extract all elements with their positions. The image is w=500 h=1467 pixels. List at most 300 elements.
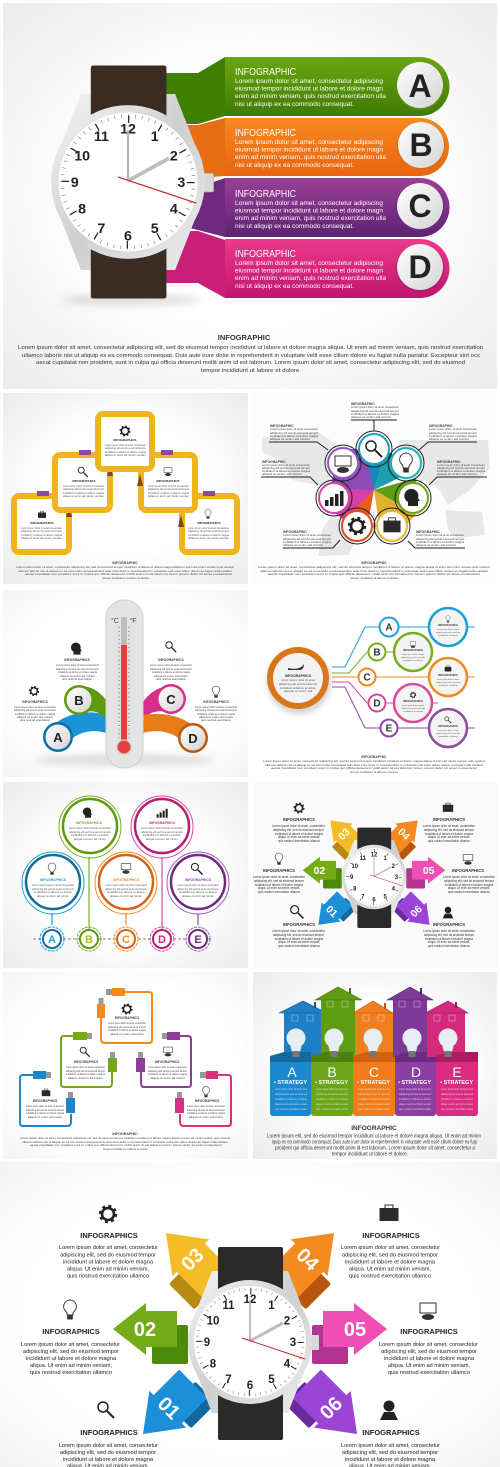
strategy E: aliqua ut enim ad minim veniam	[441, 1102, 473, 1106]
large watch: 9	[204, 1337, 210, 1349]
arrow 05: 05	[344, 1319, 366, 1341]
square: second right: Lorem ipsum dolor sit amet consectetur	[148, 484, 189, 488]
text block: gear: Lorem ipsum dolor sit amet consectetur	[14, 705, 56, 709]
ring blue: incididunt ut labore et dolore	[34, 890, 73, 894]
text block: head	[56, 643, 99, 681]
bottom caption: tempor incididunt ut labore et dolore.	[201, 368, 301, 374]
strategy A: aliqua ut enim ad minim veniam	[275, 1102, 307, 1106]
caption: INFOGRAPHIC	[112, 1132, 138, 1136]
band B green	[64, 685, 106, 718]
text block: gear: Lorem ipsum dolor sit amet, consectetur	[272, 824, 326, 828]
text block: bulb: Lorem ipsum dolor sit amet consectetur	[195, 705, 237, 709]
big circle B: adipiscing elit sed do	[401, 656, 426, 659]
chain and stems	[33, 857, 213, 939]
main circle	[267, 647, 331, 714]
text block: monitor: aliqua. Ut enim ad minim veniam,	[388, 1363, 470, 1369]
caption: Lorem ipsum dolor sit amet, consectetur adipiscing elit, sed do eiusmod tempor incididunt ut labore et dolore magna aliqua ut enim ad minim veniam quis nostrud	[258, 565, 490, 569]
ring blue	[22, 852, 84, 914]
arrow 01: 01	[153, 1393, 184, 1424]
text block: briefcase: adipiscing elit, sed do eiusmod tempor	[424, 828, 475, 832]
node E	[186, 927, 210, 951]
text block: magnifier: Lorem ipsum dolor sit amet consectetur	[150, 663, 192, 667]
text block: head: INFOGRAPHICS	[64, 658, 90, 662]
strategy B: B	[327, 1064, 337, 1080]
node C	[358, 668, 376, 686]
node C: C	[363, 672, 371, 684]
ribbon D text: nisi ut aliquip ex ea commodo consequat.	[235, 283, 354, 290]
ribbon A text: enim ad minim veniam, quis nostrud exercitation ulla	[235, 93, 386, 100]
ring purple: incididunt ut labore et dolore	[179, 890, 218, 894]
ribbon C text	[235, 189, 386, 230]
text block: blue: incididunt ut labore et dolore magna	[26, 1111, 64, 1115]
node B: B	[85, 934, 93, 946]
big circle E: Lorem ipsum dolor sit amet	[437, 729, 459, 732]
large watch: 6	[247, 1380, 253, 1392]
square: far left: INFOGRAPHICS	[30, 521, 54, 525]
petal: bar chart	[316, 480, 352, 516]
text block: person: Lorem ipsum dolor sit amet, consectetur	[423, 929, 476, 933]
big circle D: adipiscing elit sed do	[401, 707, 426, 710]
caption	[16, 561, 234, 580]
callout text: mid right: Lorem ipsum dolor sit amet consectetur	[437, 463, 485, 467]
world map silhouette	[262, 432, 490, 556]
callout text: top	[351, 402, 400, 419]
text block: bulb: adipiscing elit, sed do eiusmod tempor	[23, 1349, 119, 1355]
caption: proident qui officia deserunt mollit anim id est laborum. Lorem ipsum dolor sit amet, consectetur a	[275, 1146, 475, 1152]
ribbon D pink	[166, 231, 450, 298]
square: second right	[137, 450, 195, 510]
arrow 05	[406, 857, 445, 888]
letter badge A: A	[408, 68, 432, 104]
arrow 06	[391, 888, 439, 936]
ring pink: incididunt ut labore et dolore	[143, 833, 182, 837]
square: top centre: aliqua ut enim ad minim veniam	[105, 453, 146, 457]
text block: monitor: quis nostrud exercitation ullamco	[448, 890, 490, 894]
big circle E	[429, 709, 467, 747]
house green	[311, 987, 362, 1116]
callout text: lower right: Lorem ipsum dolor sit amet consectetur	[416, 533, 464, 537]
panel: houses with bulbs	[253, 972, 497, 1159]
text block: bulb: aliqua. Ut enim ad minim veniam,	[30, 1363, 112, 1369]
ribbon B orange	[180, 118, 449, 178]
arrow 03: 03	[337, 827, 353, 843]
panel: USB cable squares	[3, 972, 248, 1159]
text block: bulb: quis nostrud exercitation	[201, 718, 231, 722]
text block: orange: incididunt ut labore et dolore magna	[108, 1028, 146, 1032]
small watch body	[342, 828, 406, 928]
text block: bulb: incididunt ut labore et dolore magna	[197, 712, 235, 716]
text block: head: incididunt ut labore et dolore magna	[58, 670, 97, 674]
text block: pink: aliqua ut enim ad minim	[189, 1115, 224, 1119]
text block: bulb: INFOGRAPHICS	[203, 700, 229, 704]
big circle A: incididunt ut labore	[438, 634, 459, 637]
square: second left: Lorem ipsum dolor sit amet consectetur	[63, 484, 104, 488]
text block: magnifier: adipiscing elit, sed do eiusmod tempor	[273, 933, 325, 937]
callout text: upper left: adipiscing elit sed do eiusmod tempor	[270, 431, 318, 435]
text block: bulb: incididunt ut labore et dolore magna	[26, 1356, 117, 1362]
text block: gear: incididunt ut labore et dolore magna	[63, 1260, 154, 1266]
text block: monitor	[443, 855, 496, 894]
square: far right: Lorem ipsum dolor sit amet consectetur	[188, 526, 229, 530]
ribbon B text	[235, 128, 386, 169]
node C: C	[122, 934, 130, 946]
text block: magnifier	[150, 642, 192, 681]
caption: ullamco laboris nisi ut aliquip ex ea commodo consequat duis aute irure dolor in reprehenderit in voluptate velit esse cillum dolore eu fugiat nulla pariatur	[260, 569, 488, 573]
callout text: mid right: incididunt ut labore et dolore magna	[437, 469, 486, 473]
square: far left: adipiscing elit sed do eiusmod tempor	[21, 529, 62, 533]
text block: bulb: adipiscing elit sed do eiusmod tempor	[195, 708, 237, 712]
callout text: lower left: Lorem ipsum dolor sit amet consectetur	[283, 533, 331, 537]
small watch body: 4	[392, 886, 396, 892]
strategy C: Lorem ipsum dolor sit amet cons	[358, 1087, 390, 1091]
callout text: upper left	[270, 424, 319, 441]
text block: blue: adipiscing elit sed do eiusmod tempor	[26, 1108, 64, 1112]
node C	[114, 927, 138, 951]
callout text: top: adipiscing elit sed do eiusmod tempor	[351, 409, 399, 413]
strategy D: D	[411, 1064, 421, 1080]
text block: pink: Lorem ipsum dolor sit amet consectetur	[187, 1104, 225, 1108]
main circle: Lorem ipsum dolor sit amet	[281, 678, 315, 682]
ribbon C text: Lorem ipsum dolor sit amet, consectetur adipiscing	[235, 200, 383, 207]
callout text: lower right: incididunt ut labore et dolore magna	[416, 540, 465, 544]
caption: INFOGRAPHIC	[112, 561, 138, 565]
strategy C	[357, 1064, 390, 1111]
square: second left: INFOGRAPHICS	[72, 479, 96, 483]
ring green: incididunt ut labore et dolore	[71, 833, 110, 837]
ribbon A text: INFOGRAPHIC	[235, 67, 296, 78]
callout text: lower right: adipiscing elit sed do eiusmod tempor	[416, 537, 464, 541]
text block: gear: quis nostrud exercitation ullamco	[278, 839, 320, 843]
house purple	[387, 987, 436, 1116]
small watch body: 11	[360, 856, 367, 862]
text block: person	[341, 1400, 440, 1467]
text block: briefcase: INFOGRAPHICS	[433, 817, 465, 822]
ring pink: Lorem ipsum dolor sit amet consectetur	[141, 826, 183, 830]
square: second left	[55, 450, 113, 510]
callout text: lower left: adipiscing elit sed do eiusmod tempor	[283, 537, 331, 541]
letter badge C	[396, 183, 444, 231]
arrow 04: 04	[291, 1244, 323, 1276]
text block: blue: INFOGRAPHICS	[33, 1099, 57, 1103]
petal: bulb	[388, 445, 424, 481]
strategy B	[315, 1064, 348, 1111]
text block: person: INFOGRAPHICS	[433, 922, 465, 927]
text block: magnifier: quis nostrud exercitation	[156, 677, 186, 681]
text block: gear: Lorem ipsum dolor sit amet, consectetur	[59, 1245, 158, 1251]
text block: pink	[187, 1086, 225, 1119]
square: far left: aliqua ut enim ad minim veniam	[21, 536, 62, 540]
thermometer	[106, 600, 143, 768]
strategy A: adipiscing elit sed do eiusmod	[275, 1092, 307, 1096]
text block: briefcase: quis nostrud exercitation ullamco	[349, 1274, 431, 1280]
text block: person: Lorem ipsum dolor sit amet, consectetur	[341, 1443, 440, 1449]
text block: briefcase	[341, 1205, 440, 1280]
panel: top watch with four ribbons	[3, 3, 497, 389]
band C pink: C	[166, 692, 176, 707]
caption: aecat cupidatat non proident sunt in culpa qui officia deserunt mollit anim id est laborum lorem ipsum dolor sit amet consectetur	[30, 1143, 222, 1147]
text block: person: quis nostrud exercitation ullamco	[428, 944, 470, 948]
text block: monitor: adipiscing elit, sed do eiusmod tempor	[381, 1349, 477, 1355]
text block: person: adipiscing elit, sed do eiusmod tempor	[424, 933, 475, 937]
caption: INFOGRAPHIC	[351, 1125, 397, 1132]
text block: bulb: INFOGRAPHICS	[42, 1327, 100, 1336]
strategy B: adipiscing elit sed do eiusmod	[316, 1092, 348, 1096]
callout text: upper left: incididunt ut labore et dolore magna	[270, 434, 319, 438]
watch with brown strap: 6	[124, 228, 132, 244]
ring green: Lorem ipsum dolor sit amet consectetur	[69, 826, 111, 830]
ribbon A text: Lorem ipsum dolor sit amet, consectetur adipiscing	[235, 78, 383, 85]
watch with brown strap: 11	[94, 129, 109, 145]
big circle B: INFOGRAPHICS	[403, 648, 423, 652]
text block: magnifier	[272, 906, 326, 948]
strategy C: • STRATEGY	[357, 1080, 390, 1086]
shadow under bands	[35, 754, 215, 766]
text block: head: aliqua ut enim ad minim	[60, 674, 96, 678]
ring orange: incididunt ut labore et dolore	[107, 890, 146, 894]
text block: magnifier: Lorem ipsum dolor sit amet, consectetur	[59, 1443, 158, 1449]
text block: monitor: Lorem ipsum dolor sit amet, consectetur	[379, 1342, 478, 1348]
ribbon C purple	[190, 178, 450, 237]
node D	[368, 694, 386, 712]
big circle A: adipiscing elit sed do	[436, 631, 461, 634]
square: top centre: incididunt ut labore et dolore magna	[105, 450, 147, 454]
bottom caption: Lorem ipsum dolor sit amet, consectetur adipiscing elit, sed do eiusmod tempor incididunt ut labore et dolore magna aliqua. Ut enim ad minim veniam, quis nostrud exercitation	[18, 345, 483, 351]
big circle E: incididunt ut labore	[438, 735, 459, 738]
caption: Lorem ipsum dolor sit amet, consectetur adipiscing elit, sed do eiusmod tempor incididunt ut labore et dolore magna aliqua ut enim ad minim veniam quis nostrud	[16, 565, 234, 569]
strategy D: incididunt ut labore et dolore	[399, 1097, 431, 1101]
ring pink: INFOGRAPHICS	[149, 821, 176, 825]
small watch body: 6	[372, 897, 376, 903]
text block: monitor: adipiscing elit, sed do eiusmod tempor	[444, 879, 495, 883]
callout text: mid right: INFOGRAPHIC	[437, 460, 461, 464]
arrow 03: 03	[177, 1244, 209, 1276]
text block: briefcase: adipiscing elit, sed do eiusmod tempor	[342, 1252, 438, 1258]
strategy B: • STRATEGY	[315, 1080, 348, 1086]
petal: gear	[339, 508, 375, 544]
text block: monitor: Lorem ipsum dolor sit amet, consectetur	[443, 875, 496, 879]
text block: monitor: aliqua. Ut enim ad minim veniam,	[448, 886, 490, 890]
ring orange: INFOGRAPHICS	[113, 878, 140, 882]
watch with brown strap	[51, 65, 214, 299]
caption: tempor incididunt ut labore et dolore.	[332, 1152, 408, 1158]
text block: blue: Lorem ipsum dolor sit amet consectetur	[26, 1104, 64, 1108]
ribbon A text	[235, 67, 386, 108]
ring purple: aliqua ut enim ad minim	[182, 894, 215, 898]
arrow 05: 05	[423, 866, 435, 877]
text block: magnifier: INFOGRAPHICS	[80, 1428, 138, 1437]
arrow 02	[303, 857, 342, 888]
letter badge D	[396, 244, 444, 292]
large watch: 3	[290, 1337, 296, 1349]
big circle E: adipiscing elit sed do	[436, 732, 461, 735]
caption	[263, 755, 485, 774]
ribbon C text: enim ad minim veniam, quis nostrud exercitation ulla	[235, 215, 386, 222]
large watch: 10	[207, 1316, 219, 1328]
arrow 01	[309, 888, 357, 936]
ring green: aliqua ut enim ad minim	[74, 837, 107, 841]
callout text: mid left: adipiscing elit sed do eiusmod tempor	[262, 466, 310, 470]
square: second left: adipiscing elit sed do eiusmod tempor	[63, 487, 104, 491]
text block: person: incididunt ut labore et dolore magna	[345, 1457, 436, 1463]
arrow 04	[263, 1215, 358, 1309]
arrow 02	[113, 1303, 188, 1364]
strategy C: adipiscing elit sed do eiusmod	[358, 1092, 390, 1096]
thermometer: °C	[111, 617, 119, 625]
big circle D: Lorem ipsum dolor sit amet	[402, 704, 424, 707]
ring blue: adipiscing elit sed do eiusmod tempor	[32, 887, 74, 891]
large watch: 2	[284, 1316, 290, 1328]
callout text: upper right: adipiscing elit sed do eiusmod tempor	[429, 431, 477, 435]
callout text: upper left: INFOGRAPHIC	[270, 424, 294, 428]
strategy E: quis nostrud exercitation ullam	[441, 1107, 473, 1111]
text block: bulb: quis nostrud exercitation ullamco	[30, 1370, 112, 1376]
caption: INFOGRAPHIC	[361, 561, 387, 565]
panel: branching circles	[253, 590, 497, 777]
square: far left: Lorem ipsum dolor sit amet consectetur	[21, 526, 62, 530]
square: far left: incididunt ut labore et dolore magna	[21, 533, 63, 537]
caption: ullamco laboris nisi ut aliquip ex ea commodo consequat duis aute irure dolor in reprehenderit in voluptate velit esse cillum dolore eu fugiat nulla pariatur	[22, 1140, 228, 1144]
letter badge B: B	[409, 127, 433, 163]
text block: briefcase: Lorem ipsum dolor sit amet, consectetur	[423, 824, 476, 828]
small watch body: 7	[361, 894, 365, 900]
caption: tempor incididunt ut labore et dolore	[350, 770, 398, 774]
caption: aecat cupidatat non proident sunt in culpa qui officia deserunt mollit anim id est laborum lorem ipsum dolor sit amet consectetur	[268, 572, 480, 576]
ring blue: Lorem ipsum dolor sit amet consectetur	[32, 883, 74, 887]
text block: magnifier	[59, 1402, 158, 1467]
square: second right: adipiscing elit sed do eiusmod tempor	[148, 487, 189, 491]
text block: gear: adipiscing elit, sed do eiusmod tempor	[60, 1252, 156, 1258]
large watch: 1	[268, 1300, 275, 1312]
node E: E	[386, 724, 393, 734]
cable pink	[175, 1071, 231, 1126]
text block: gear	[59, 1206, 158, 1280]
text block: magnifier: Lorem ipsum dolor sit amet, consectetur	[272, 929, 326, 933]
panel: small watch with numbered arrows	[253, 782, 497, 968]
ribbon D text: eiusmod tempor incididunt ut labore et dolore magn	[235, 268, 383, 274]
watch with brown strap: 7	[97, 221, 105, 237]
text block: gear	[272, 803, 326, 843]
square: second right: incididunt ut labore et dolore magna	[148, 491, 190, 495]
text block: gear	[14, 687, 56, 722]
callout text: mid right: aliqua ut enim ad minim	[437, 472, 478, 476]
caption: ullamco laboris nisi ut aliquip ex ea commodo consequat duis aute irure dolor in reprehenderit in voluptate velit esse cillum dolore eu fugiat nulla pariatur	[18, 569, 232, 573]
big circle A: Lorem ipsum dolor sit amet	[437, 628, 459, 631]
strategy B: incididunt ut labore et dolore	[316, 1097, 348, 1101]
node E	[380, 720, 398, 736]
callout text: mid left	[262, 460, 311, 476]
text block: blue: aliqua ut enim ad minim	[28, 1115, 63, 1119]
letter badge A	[396, 62, 444, 110]
text block: purple: incididunt ut labore et dolore magna	[148, 1072, 187, 1076]
text block: orange: aliqua ut enim ad minim	[110, 1032, 145, 1036]
callout text: lower left: incididunt ut labore et dolore magna	[283, 540, 332, 544]
big circle D: INFOGRAPHICS	[403, 699, 423, 703]
square: far right	[178, 491, 237, 552]
strategy C: incididunt ut labore et dolore	[358, 1097, 390, 1101]
ribbon D text	[235, 249, 386, 290]
arrow 02: 02	[314, 866, 325, 877]
thermometer: °F	[129, 617, 137, 625]
strategy A: quis nostrud exercitation ullam	[275, 1107, 307, 1111]
callout text: top: aliqua ut enim ad minim	[351, 415, 392, 419]
callout text: upper right: aliqua ut enim ad minim	[429, 437, 470, 441]
text block: gear: quis nostrud exercitation	[20, 718, 50, 722]
strategy A: Lorem ipsum dolor sit amet cons	[275, 1087, 307, 1091]
callout text: mid left: Lorem ipsum dolor sit amet consectetur	[262, 463, 310, 467]
arrow 01: 01	[323, 904, 339, 920]
band A blue: A	[53, 730, 63, 745]
text block: bulb: aliqua. Ut enim ad minim veniam,	[258, 886, 300, 890]
node B	[368, 644, 386, 660]
cable orange	[97, 988, 152, 1043]
text block: purple: INFOGRAPHICS	[155, 1060, 179, 1064]
ring pink	[131, 796, 193, 858]
ribbon B text: Lorem ipsum dolor sit amet, consectetur adipiscing	[235, 139, 383, 146]
text block: pink: INFOGRAPHICS	[195, 1099, 219, 1103]
text block: orange: Lorem ipsum dolor sit amet consectetur	[108, 1021, 146, 1025]
text block: purple: Lorem ipsum dolor sit amet consectetur	[148, 1065, 187, 1069]
text block: gear: INFOGRAPHICS	[80, 1231, 138, 1240]
watch with brown strap: 10	[74, 148, 90, 164]
text block: person: incididunt ut labore et dolore magna	[425, 937, 473, 941]
ring purple: adipiscing elit sed do eiusmod tempor	[177, 887, 219, 891]
ribbon A text: nisi ut aliquip ex ea commodo consequat.	[235, 101, 354, 108]
ribbon B text: enim ad minim veniam, quis nostrud exercitation ulla	[235, 154, 386, 161]
text block: green: adipiscing elit sed do eiusmod tempor	[66, 1069, 105, 1073]
text block: bulb: Lorem ipsum dolor sit amet, consectetur	[21, 1342, 120, 1348]
ring purple: Lorem ipsum dolor sit amet consectetur	[177, 883, 219, 887]
large watch: 11	[222, 1300, 235, 1312]
ribbon A green	[166, 57, 449, 124]
callout text: lower right	[416, 530, 465, 547]
band A blue	[43, 712, 106, 752]
small watch body: 5	[384, 894, 388, 900]
petal: briefcase	[374, 508, 410, 544]
ring orange: aliqua ut enim ad minim	[110, 894, 143, 898]
square: top centre: adipiscing elit sed do eiusmod tempor	[105, 446, 146, 450]
big circle C: adipiscing elit sed do	[436, 681, 461, 684]
strategy D	[398, 1064, 431, 1111]
panel: yellow pencil squares	[3, 393, 248, 584]
big circle A	[429, 608, 467, 646]
large watch: 8	[210, 1358, 217, 1370]
text block: bulb	[253, 853, 306, 894]
big circle C: INFOGRAPHICS	[438, 673, 458, 677]
arrow 06: 06	[409, 904, 425, 920]
strategy B: Lorem ipsum dolor sit amet cons	[316, 1087, 348, 1091]
text block: bulb	[21, 1300, 120, 1376]
arrow 04	[381, 811, 430, 860]
text block: green	[66, 1047, 105, 1080]
main circle: adipiscing elit sed do eiusmod	[279, 682, 318, 686]
ribbon C text: eiusmod tempor incididunt ut labore et dolore magn	[235, 208, 383, 214]
text block: magnifier: adipiscing elit, sed do eiusmod tempor	[60, 1450, 156, 1456]
panel: petals over world map	[253, 393, 497, 584]
strategy C: aliqua ut enim ad minim veniam	[358, 1102, 390, 1106]
node A	[40, 927, 64, 951]
text block: briefcase: incididunt ut labore et dolore magna	[345, 1260, 436, 1266]
text block: bulb: adipiscing elit, sed do eiusmod tempor	[254, 879, 305, 883]
square: second left: aliqua ut enim ad minim veniam	[63, 494, 104, 498]
text block: gear: adipiscing elit, sed do eiusmod tempor	[273, 828, 325, 832]
small watch body: 3	[395, 875, 399, 881]
house orange	[353, 1001, 395, 1116]
strategy A: • STRATEGY	[274, 1080, 307, 1086]
ring pink: aliqua ut enim ad minim	[146, 837, 179, 841]
strategy A	[274, 1064, 307, 1111]
small watch body: 8	[353, 886, 357, 892]
band D orange: D	[188, 731, 198, 746]
